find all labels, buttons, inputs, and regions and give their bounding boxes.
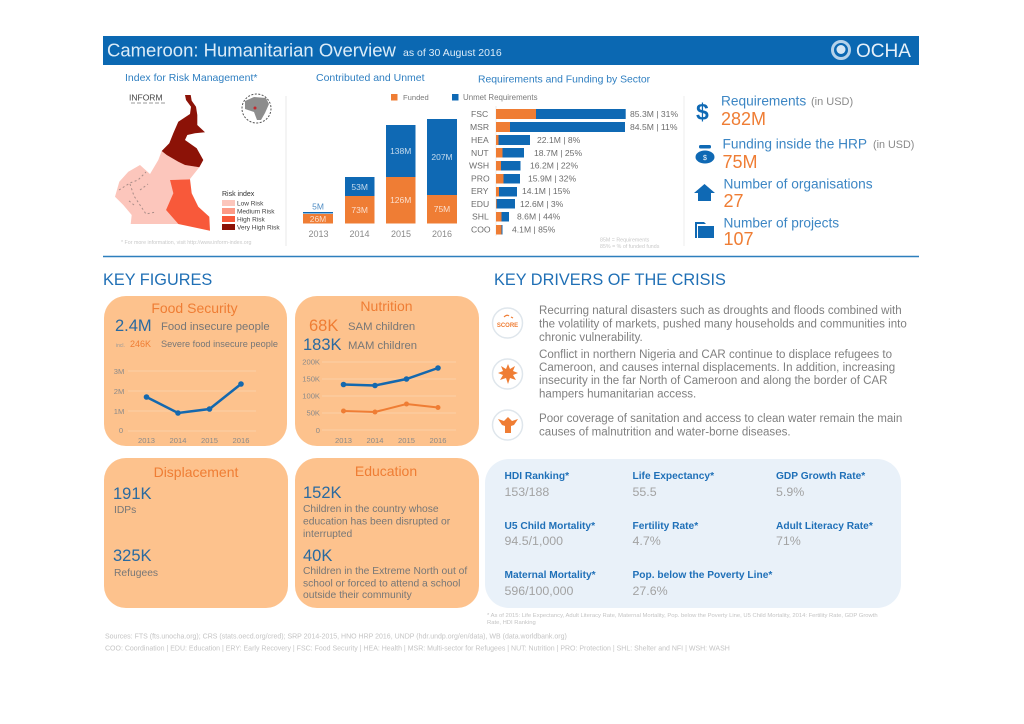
- heading: contributed and unmet: Contributed and Unmet: [316, 72, 425, 84]
- sector SHL: [472, 212, 561, 222]
- sector chart note: 85M = Requirements: [600, 238, 650, 244]
- line chart: SAM and MAM children: [302, 358, 456, 445]
- line chart: food insecure people: 2015: [201, 436, 218, 445]
- panel: education: Children in the Extreme North out of: [303, 566, 467, 577]
- indicator: life expectancy: [632, 471, 714, 499]
- requirements: 282M: [721, 109, 766, 129]
- bar 2015: [386, 125, 416, 239]
- sector chart note: [600, 238, 660, 250]
- bar 2013: 5M: [312, 202, 324, 212]
- key numbers column: [684, 94, 914, 249]
- bar 2014: 53M: [351, 182, 368, 192]
- driver: natural disasters: the volatility of markets, pushed many households and communities into: [539, 318, 907, 330]
- indicator: maternal mortality: [504, 570, 596, 598]
- bar 2014: 2014: [349, 229, 370, 239]
- driver: conflict: Conflict in northern Nigeria and CAR continue to displace refugees to: [539, 349, 892, 361]
- header banner: Cameroon: Humanitarian Overview: [107, 40, 397, 60]
- sector EDU: 12.6M | 3%: [520, 199, 564, 209]
- sector SHL: SHL: [472, 212, 489, 222]
- bar 2015: 126M: [390, 195, 411, 205]
- INFORM logo: INFORM: [129, 92, 163, 102]
- locator globe: [242, 94, 271, 123]
- sector HEA: HEA: [471, 135, 489, 145]
- sector FSC: [471, 109, 678, 119]
- indicators footnote: Rate, HDI Ranking: [487, 620, 536, 626]
- sector COO: COO: [471, 224, 491, 234]
- panel: education: 40K: [303, 547, 332, 565]
- bar 2016: 75M: [434, 204, 450, 214]
- indicator: population below poverty line: 27.6%: [632, 584, 668, 598]
- bar 2016: [427, 119, 457, 239]
- sector SHL: 8.6M | 44%: [517, 212, 561, 222]
- heading: key figures: KEY FIGURES: [103, 271, 212, 289]
- sector chart note: 85% = % of funded funds: [600, 244, 660, 250]
- risk legend: Very High Risk: [237, 224, 280, 232]
- driver: natural disasters: chronic vulnerability.: [539, 332, 643, 344]
- line chart: food insecure people: 2M: [114, 387, 124, 396]
- indicator: U5 child mortality: [504, 521, 595, 548]
- indicator: HDI ranking: 153/188: [504, 485, 549, 499]
- bar 2013: 26M: [310, 214, 326, 224]
- bar 2014: [345, 177, 374, 239]
- indicator: U5 child mortality: U5 Child Mortality*: [504, 521, 595, 532]
- driver: conflict: hampers humanitarian access.: [539, 388, 696, 400]
- sources and acronyms: [105, 634, 730, 652]
- panel: food security: incl.: [116, 343, 125, 349]
- sector NUT: NUT: [471, 148, 489, 158]
- sector MSR: 84.5M | 11%: [630, 122, 678, 132]
- heading: requirements and funding by sector: Requirements and Funding by Sector: [478, 74, 651, 86]
- line chart: SAM and MAM children: 100K: [302, 392, 320, 400]
- line chart: food insecure people: 1M: [114, 407, 124, 416]
- panel: displacement: 325K: [113, 547, 152, 565]
- line chart: food insecure people: 3M: [114, 367, 124, 376]
- panel: food security: 2.4M: [115, 317, 152, 335]
- organisations: Number of organisations: [724, 176, 873, 192]
- chart legend: [391, 93, 538, 102]
- indicators footnote: [487, 613, 878, 626]
- line chart: SAM and MAM children: 50K: [306, 408, 320, 418]
- indicator: adult literacy rate: Adult Literacy Rate*: [776, 521, 873, 532]
- panel: education: school or forced to attend a school: [303, 578, 460, 590]
- sector WSH: WSH: [469, 160, 489, 170]
- funding: Funding inside the HRP: [722, 136, 867, 152]
- panel: food security: Severe food insecure people: [161, 339, 278, 349]
- sources and acronyms: Sources: FTS (fts.unocha.org); CRS (stats.oecd.org/cred); SRP 2014-2015, HNO HRP 2016, UNDP (hdr.undp.org/en/data), WB (data.worldbank.org): [105, 634, 567, 640]
- sector WSH: 16.2M | 22%: [530, 160, 578, 170]
- map footnote: * For more information, visit http://www.inform-index.org: [121, 240, 251, 246]
- sector HEA: [471, 135, 581, 145]
- panel: food security: 246K: [130, 339, 151, 349]
- bar 2013: [303, 202, 333, 239]
- line chart: food insecure people: 2014: [170, 436, 186, 445]
- panel: displacement: 191K: [113, 485, 152, 503]
- indicator: U5 child mortality: 94.5/1,000: [504, 534, 563, 548]
- indicator: HDI ranking: HDI Ranking*: [504, 471, 569, 482]
- risk legend: [222, 191, 280, 232]
- line chart: SAM and MAM children: 150K: [302, 374, 320, 384]
- panel: nutrition: MAM children: [348, 340, 417, 352]
- sector FSC: FSC: [471, 109, 488, 119]
- risk legend: Low Risk: [237, 200, 264, 208]
- panel: nutrition: 68K: [309, 317, 338, 335]
- organisations: 27: [724, 191, 744, 211]
- indicators footnote: * As of 2015: Life Expectancy, Adult Literacy Rate, Maternal Mortality, Pop. below the Poverty Line, U5 Child Mortality, 2014: Fertility Rate, GDP Growth: [487, 613, 878, 619]
- sector ERY: [471, 186, 570, 196]
- driver: sanitation and water: [492, 410, 902, 440]
- heading: key drivers of the crisis: KEY DRIVERS OF THE CRISIS: [494, 271, 726, 289]
- bar 2013: 2013: [308, 229, 329, 239]
- map: low risk region: [115, 151, 199, 224]
- line chart: food insecure people: [114, 367, 256, 445]
- header banner: OCHA: [856, 41, 911, 62]
- panel: food security: [104, 296, 287, 446]
- risk map of Cameroon: [115, 92, 280, 246]
- sector FSC: 85.3M | 31%: [630, 109, 678, 119]
- sources and acronyms: COO: Coordination | EDU: Education | ERY: Early Recovery | FSC: Food Security | HEA: Health | MSR: Multi-sector for Refugees | NUT: Nutrition | PRO: Protection | SHL: Shelter and NFI | WSH: WASH: [105, 646, 730, 652]
- indicator: population below poverty line: Pop. below the Poverty Line*: [632, 570, 772, 581]
- panel: displacement: IDPs: [114, 505, 136, 516]
- bar 2015: 2015: [391, 229, 411, 239]
- indicator: population below poverty line: [632, 570, 772, 598]
- indicator: GDP growth rate: 5.9%: [776, 485, 804, 499]
- driver: conflict: [492, 349, 895, 400]
- panel: education: outside their community: [303, 590, 413, 601]
- heading: index for risk management: Index for Risk Management*: [125, 72, 257, 84]
- funding: (in USD): [873, 139, 914, 151]
- projects: [695, 216, 839, 249]
- bar 2015: 138M: [390, 146, 411, 156]
- sector MSR: MSR: [470, 122, 489, 132]
- panel: nutrition: SAM children: [348, 321, 415, 333]
- panel: displacement: Displacement: [154, 464, 239, 480]
- sector NUT: 18.7M | 25%: [534, 148, 582, 158]
- indicator: adult literacy rate: 71%: [776, 534, 801, 548]
- map: internal boundaries: [119, 172, 156, 214]
- driver: sanitation and water: Poor coverage of sanitation and access to clean water remain the main: [539, 413, 902, 425]
- header banner: [103, 36, 919, 65]
- line chart: food insecure people: 0: [119, 426, 123, 435]
- line chart: SAM and MAM children: 2014: [367, 436, 383, 445]
- panel: food security: Food insecure people: [161, 321, 270, 333]
- contributed and unmet stacked bar chart: [286, 96, 457, 246]
- sector EDU: [471, 199, 564, 209]
- bar 2014: 73M: [351, 205, 368, 215]
- driver: sanitation and water: causes of malnutrition and water-borne diseases.: [539, 426, 791, 438]
- panel: education: [295, 458, 479, 608]
- panel: food security: Food Security: [151, 300, 238, 316]
- map: very high risk region: [162, 95, 205, 167]
- risk legend: High Risk: [237, 216, 266, 224]
- driver: conflict: Cameroon, and causes internal displacements. In addition, increasing: [539, 362, 895, 374]
- panel: country indicators: [485, 459, 901, 608]
- sector COO: 4.1M | 85%: [512, 224, 556, 234]
- sector PRO: [471, 174, 576, 184]
- line chart: SAM and MAM children: 2016: [430, 436, 446, 445]
- driver: natural disasters: Recurring natural disasters such as droughts and floods combined with: [539, 305, 902, 317]
- panel: nutrition: Nutrition: [360, 298, 413, 314]
- indicator: life expectancy: Life Expectancy*: [632, 471, 714, 482]
- sector bar chart: [469, 106, 678, 236]
- panel: displacement: Refugees: [114, 568, 158, 579]
- sector ERY: ERY: [471, 186, 489, 196]
- panel: nutrition: [295, 296, 479, 446]
- projects: Number of projects: [724, 216, 839, 230]
- sector ERY: 14.1M | 15%: [522, 186, 570, 196]
- map: high risk region: [166, 179, 210, 231]
- indicator: maternal mortality: Maternal Mortality*: [504, 570, 596, 581]
- driver: natural disasters: [492, 305, 907, 344]
- sector EDU: EDU: [471, 199, 489, 209]
- chart legend: Funded: [403, 93, 429, 102]
- line chart: SAM and MAM children: 2013: [335, 436, 352, 445]
- funding: [696, 136, 914, 172]
- funding: 75M: [722, 152, 758, 172]
- indicator: adult literacy rate: [776, 521, 873, 548]
- panel: displacement: [104, 458, 288, 608]
- requirements: [696, 94, 853, 129]
- header banner: as of 30 August 2016: [403, 47, 502, 59]
- sector WSH: [469, 160, 578, 170]
- sector PRO: PRO: [471, 174, 490, 184]
- indicator: life expectancy: 55.5: [632, 485, 657, 499]
- line chart: SAM and MAM children: 2015: [398, 436, 415, 445]
- line chart: food insecure people: 2013: [138, 436, 155, 445]
- indicator: fertility rate: [632, 521, 698, 548]
- panel: nutrition: 183K: [303, 336, 342, 354]
- sector MSR: [470, 122, 678, 132]
- sector HEA: 22.1M | 8%: [537, 135, 581, 145]
- indicator: HDI ranking: [504, 471, 569, 499]
- panel: education: Children in the country whose: [303, 504, 439, 515]
- requirements: Requirements: [721, 94, 806, 108]
- sector PRO: 15.9M | 32%: [528, 174, 576, 184]
- driver: natural disasters: SCORE: [497, 323, 518, 329]
- risk legend: Medium Risk: [237, 208, 275, 216]
- bar 2016: 207M: [431, 152, 453, 162]
- requirements: (in USD): [811, 96, 853, 108]
- funding: $: [703, 155, 707, 162]
- chart legend: Unmet Requirements: [463, 93, 538, 102]
- requirements: $: [696, 99, 709, 125]
- panel: education: education has been disrupted or: [303, 516, 451, 528]
- sector COO: [471, 224, 556, 234]
- line chart: SAM and MAM children: 200K: [302, 358, 320, 366]
- indicator: GDP growth rate: [776, 471, 865, 499]
- bar 2016: 2016: [432, 229, 452, 239]
- risk legend: Risk index: [222, 191, 255, 198]
- panel: education: interrupted: [303, 529, 353, 540]
- indicator: maternal mortality: 596/100,000: [504, 584, 574, 598]
- panel: education: 152K: [303, 484, 342, 502]
- projects: 107: [724, 229, 754, 249]
- line chart: food insecure people: 2016: [233, 436, 249, 445]
- organisations: [694, 176, 873, 211]
- panel: education: Education: [355, 463, 417, 479]
- indicator: GDP growth rate: GDP Growth Rate*: [776, 471, 865, 482]
- indicator: fertility rate: Fertility Rate*: [632, 521, 698, 532]
- line chart: SAM and MAM children: 0: [316, 426, 320, 435]
- indicator: fertility rate: 4.7%: [632, 534, 661, 548]
- driver: conflict: insecurity in the far North of Cameroon and along the border of CAR: [539, 375, 888, 387]
- sector NUT: [471, 148, 582, 158]
